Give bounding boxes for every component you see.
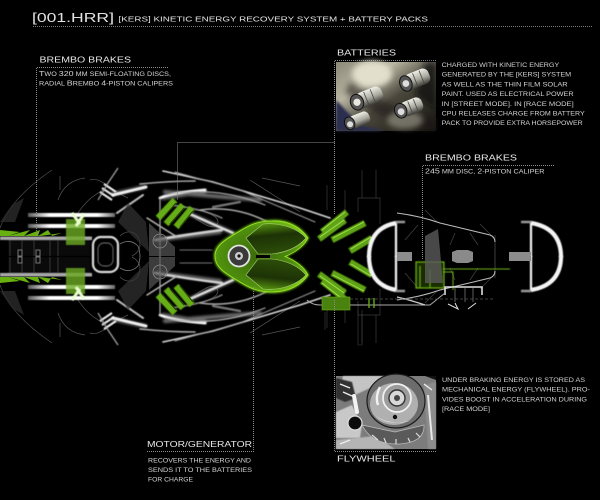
flywheel disc xyxy=(367,374,425,428)
fuel cap xyxy=(228,246,250,266)
panel: motor/generator xyxy=(147,286,254,484)
text: flywheel: [RACE MODE] xyxy=(442,407,490,413)
text: flywheel: MECHANICAL ENERGY (FLYWHEEL). PRO- xyxy=(442,388,590,394)
text: motor/generator: RECOVERS THE ENERGY AND xyxy=(148,458,252,464)
panel: batteries xyxy=(178,48,585,214)
heading: flywheel: FLYWHEEL xyxy=(337,455,396,464)
rear green motor wiring xyxy=(416,262,510,290)
heading: batteries: BATTERIES xyxy=(337,48,396,58)
text: flywheel xyxy=(442,378,590,413)
tank upper lobe xyxy=(246,224,306,254)
text: batteries: IN [STREET MODE]. IN [RACE MODE] xyxy=(442,102,574,108)
leader line: front brakes xyxy=(36,68,168,235)
leader line: flywheel xyxy=(334,300,436,452)
leader line: motor/generator xyxy=(147,286,254,452)
heading: front brakes: BREMBO BRAKES xyxy=(40,56,131,65)
leader lines: batteries xyxy=(178,60,436,214)
title description: [KERS] KINETIC ENERGY RECOVERY SYSTEM + BATTERY PACKS xyxy=(118,14,428,23)
text: batteries: GENERATED BY THE [KERS] SYSTEM xyxy=(442,73,571,79)
panel: bike x-ray drawing xyxy=(0,168,561,345)
text: front brakes: TWO 320 MM SEMI-FLOATING DISCS, xyxy=(39,69,171,78)
leader line: rear brakes xyxy=(422,166,554,259)
text: batteries: PACK TO PROVIDE EXTRA HORSEPOWER xyxy=(442,121,583,127)
battery cell 2 xyxy=(397,67,432,93)
photo: flywheel xyxy=(336,374,436,449)
battery cell 1 xyxy=(348,85,385,112)
text: motor/generator xyxy=(148,458,252,484)
rear shock panel xyxy=(425,229,443,283)
title xyxy=(32,10,428,25)
text: motor/generator: SENDS IT TO THE BATTERIES xyxy=(148,468,252,474)
text: batteries: PAINT. USED AS ELECTRICAL POWER xyxy=(442,92,574,98)
exhaust and lower frame xyxy=(307,287,494,345)
text: flywheel: VIDES BOOST IN ACCELERATION DURING xyxy=(442,398,587,404)
text: front brakes: RADIAL BREMBO 4-PISTON CALIPERS xyxy=(39,79,173,88)
text: batteries: AS WELL AS THE THIN FILM SOLAR xyxy=(442,82,569,88)
panel: rear Brembo brakes xyxy=(422,154,554,259)
text: flywheel: UNDER BRAKING ENERGY IS STORED AS xyxy=(442,378,585,384)
tank centre slit xyxy=(256,255,270,258)
front headlight ring xyxy=(93,237,118,272)
tank lower lobe xyxy=(246,259,306,289)
flywheel housing xyxy=(362,425,424,444)
green box under seat xyxy=(322,297,350,310)
text: rear brakes: 245 MM DISC, 2-PISTON CALIPER xyxy=(425,166,545,176)
text: motor/generator: FOR CHARGE xyxy=(148,478,193,484)
title code: [001.HRR] xyxy=(32,10,114,25)
panel: flywheel xyxy=(334,300,590,464)
text: batteries: CPU RELEASES CHARGE FROM BATTERY xyxy=(442,112,585,118)
nose circle xyxy=(120,241,140,271)
mirrored lower half of bike xyxy=(0,243,561,345)
green clips xyxy=(369,298,374,308)
text: batteries xyxy=(442,63,585,127)
text: batteries: CHARGED WITH KINETIC ENERGY xyxy=(442,63,559,69)
battery cell 3 xyxy=(392,95,425,120)
heading: motor/generator: MOTOR/GENERATOR xyxy=(147,440,252,449)
text: front brakes xyxy=(39,69,173,88)
heading: rear brakes: BREMBO BRAKES xyxy=(425,154,517,163)
green fuel tank xyxy=(214,220,309,293)
panel: front Brembo brakes xyxy=(36,56,173,235)
battery cell 4 xyxy=(343,109,372,132)
photo: battery cells xyxy=(336,61,436,132)
